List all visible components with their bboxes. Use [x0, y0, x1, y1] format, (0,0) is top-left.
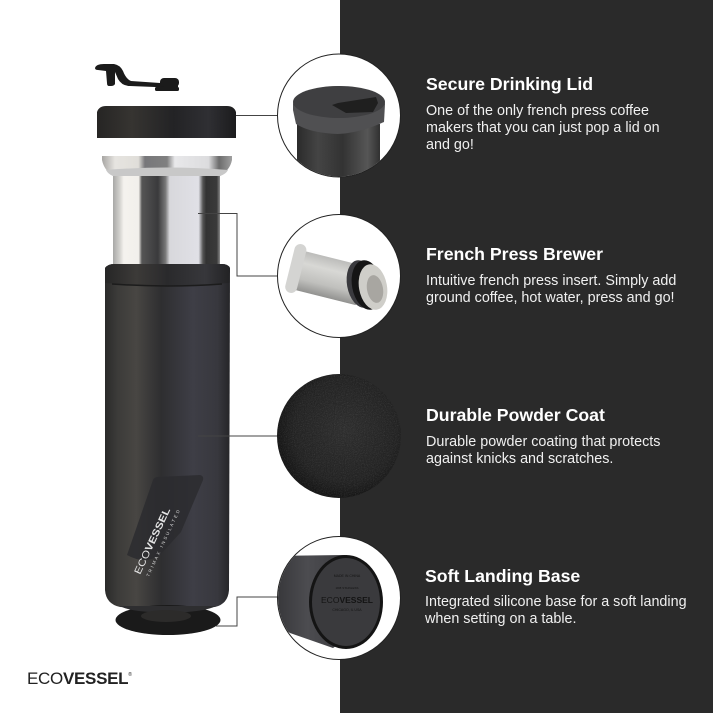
- text: durable powder coat: [426, 434, 660, 467]
- callout circle: soft landing base detail: 18/8 STAINLESS: [336, 586, 358, 590]
- icon: drinking lid tab: [95, 64, 179, 91]
- text: secure drinking lid: makers that you can just pop a lid on: [426, 120, 660, 136]
- connector lines: [198, 116, 278, 626]
- text: durable powder coat: against knicks and scratches.: [426, 451, 613, 467]
- brand logo: ECOVESSEL®: [27, 669, 132, 688]
- text: durable powder coat: Durable powder coating that protects: [426, 434, 660, 450]
- callout circle: lid detail: [278, 54, 400, 180]
- callout circle: soft landing base detail: ECOVESSEL: [321, 595, 373, 605]
- callout circle: soft landing base detail: [270, 536, 400, 660]
- text: secure drinking lid: [426, 102, 660, 153]
- heading: soft landing base: Soft Landing Base: [425, 566, 580, 586]
- text: secure drinking lid: One of the only french press coffee: [426, 102, 649, 118]
- text: french press brewer: ground coffee, hot water, press and go!: [426, 290, 675, 306]
- text: soft landing base: when setting on a table.: [425, 611, 577, 627]
- callout circle: soft landing base detail: CHICAGO, IL USA: [332, 608, 362, 612]
- heading: french press brewer: French Press Brewer: [426, 244, 603, 264]
- body logo patch: [127, 475, 203, 577]
- callout circle: soft landing base detail: MADE IN CHINA: [334, 574, 361, 578]
- silicone base: [116, 605, 220, 635]
- text: soft landing base: [425, 594, 687, 627]
- text: secure drinking lid: and go!: [426, 137, 474, 153]
- text: french press brewer: [426, 273, 676, 306]
- text: soft landing base: Integrated silicone base for a soft landing: [425, 594, 687, 610]
- steel french press insert: [102, 156, 232, 266]
- text: french press brewer: Intuitive french press insert. Simply add: [426, 273, 676, 289]
- heading: secure drinking lid: Secure Drinking Lid: [426, 74, 593, 94]
- body logo patch: TRIMAX INSULATED: [145, 508, 181, 577]
- heading: durable powder coat: Durable Powder Coat: [426, 405, 605, 425]
- callout circle: powder coat texture: [277, 374, 401, 498]
- lid: [97, 106, 236, 138]
- callout circle: french press brewer detail: [278, 214, 400, 338]
- body logo patch: ECOVESSEL: [133, 506, 173, 576]
- vessel body: [105, 264, 230, 608]
- product illustration and callouts: [95, 54, 401, 660]
- dark background panel: [340, 0, 713, 713]
